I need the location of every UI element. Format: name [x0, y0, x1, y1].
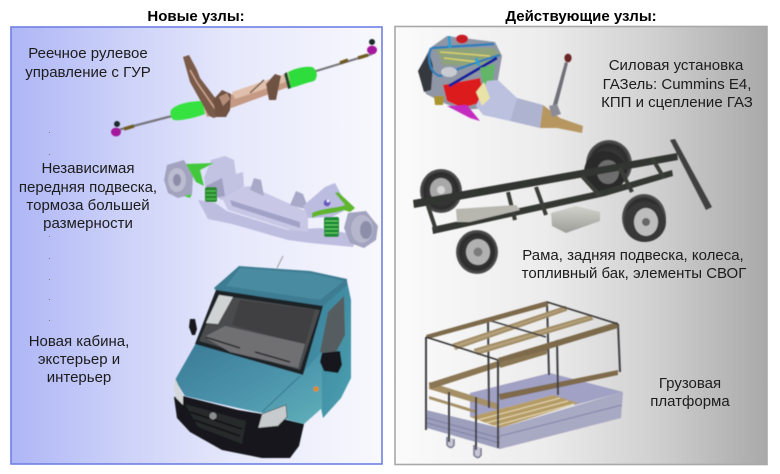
wheel: front lower: [456, 230, 498, 274]
roof slats: [452, 307, 592, 354]
panel: new units frame: [11, 27, 382, 464]
fuel tank: [551, 206, 600, 233]
text: suspension label: передняя подвеска,: [19, 179, 157, 196]
top red cap: [456, 35, 468, 43]
cross members: [428, 158, 664, 230]
roof beam back: [426, 301, 548, 339]
side window: [320, 296, 345, 358]
dark blue pipe: [449, 58, 497, 86]
turbo: [441, 67, 457, 77]
illustration: chassis: [413, 139, 712, 274]
exhaust: [456, 205, 520, 222]
text: chassis label: Рама, задняя подвеска, колеса,: [522, 247, 744, 264]
rear tailgate: [426, 410, 500, 449]
text: powertrain label: ГАЗель: Cummins E4,: [603, 76, 751, 93]
right mirror: [320, 351, 342, 373]
uprights: [426, 302, 620, 450]
illustration: steering rack: [111, 39, 377, 136]
panel: existing units frame: [395, 26, 767, 464]
right tower: [303, 183, 353, 218]
frame upper rail: [413, 153, 678, 208]
wood floor: [470, 395, 578, 428]
rear cross beam: [670, 139, 712, 210]
text: steering label: [25, 45, 151, 81]
roof: [214, 266, 347, 307]
text: platform label: платформа: [650, 393, 730, 410]
text: powertrain label: КПП и сцепление ГАЗ: [601, 94, 753, 111]
text: platform label: Грузовая: [659, 375, 721, 392]
right side batten: [499, 370, 618, 400]
magenta pan: [447, 105, 480, 121]
wheel: upper rear: [586, 140, 632, 188]
text: cab label: экстерьер и: [38, 351, 120, 368]
orange marker: [313, 386, 319, 392]
side door: [300, 281, 351, 418]
blue tubes: [429, 44, 500, 76]
red block: [443, 78, 485, 108]
front black bumper: [174, 396, 304, 458]
text: suspension label: тормоза большей: [26, 197, 150, 214]
heading: new units: Новые узлы:: [147, 8, 245, 25]
windshield interior: [199, 295, 320, 370]
brown tail shaft: [540, 105, 583, 133]
text: platform label: [650, 375, 730, 410]
column and gearbox: [183, 55, 226, 118]
rear slats: [429, 382, 499, 413]
illustration: engine and gearbox: [418, 35, 583, 133]
left disc: [164, 160, 193, 198]
oil filter: [434, 96, 444, 105]
gear lever: [552, 62, 568, 110]
illustration: front suspension: [164, 156, 378, 248]
gearbox: [510, 98, 543, 128]
right spring: [324, 217, 339, 237]
cylinder head: [435, 48, 502, 66]
text: chassis label: [522, 247, 746, 282]
right disc: [344, 211, 378, 248]
text: cab label: интерьер: [47, 369, 111, 386]
hitch loops: [447, 437, 481, 458]
illustration: cargo platform: [426, 301, 623, 458]
text: steering label: Реечное рулевое: [28, 45, 148, 62]
text: suspension label: размерности: [43, 215, 133, 232]
left side batten: [429, 345, 548, 389]
text: suspension label: Независимая: [41, 160, 135, 177]
left boot: [170, 101, 205, 120]
left mirror: [189, 319, 197, 335]
left wishbone: [186, 163, 214, 186]
text: powertrain label: [601, 57, 753, 111]
green part: [480, 64, 495, 90]
grille badge: [209, 412, 217, 420]
right wishbone: [312, 192, 355, 218]
text: chassis label: топливный бак, элементы СВОГ: [522, 265, 746, 282]
wheel: lower rear: [622, 194, 666, 242]
text: powertrain label: Силовая установка: [609, 57, 744, 74]
wheel: upper front: [420, 169, 462, 213]
front body side: [500, 392, 623, 449]
text: suspension label: [19, 160, 157, 232]
text: cab label: Новая кабина,: [29, 333, 129, 350]
illustration: new cab: [174, 256, 351, 458]
hood: [175, 343, 322, 424]
left spring: [205, 187, 217, 202]
heading: existing units: Действующие узлы:: [505, 8, 657, 25]
bell housing: [476, 80, 517, 121]
right boot: [288, 67, 317, 88]
left bump block: [204, 156, 244, 200]
headlights: [258, 405, 287, 428]
far side wall: [470, 373, 623, 417]
frame lower rail: [432, 170, 673, 234]
windshield frame: [195, 290, 323, 375]
text: cab label: [29, 333, 129, 386]
text: steering label: управление с ГУР: [25, 64, 151, 81]
roof beam front: [498, 322, 618, 364]
